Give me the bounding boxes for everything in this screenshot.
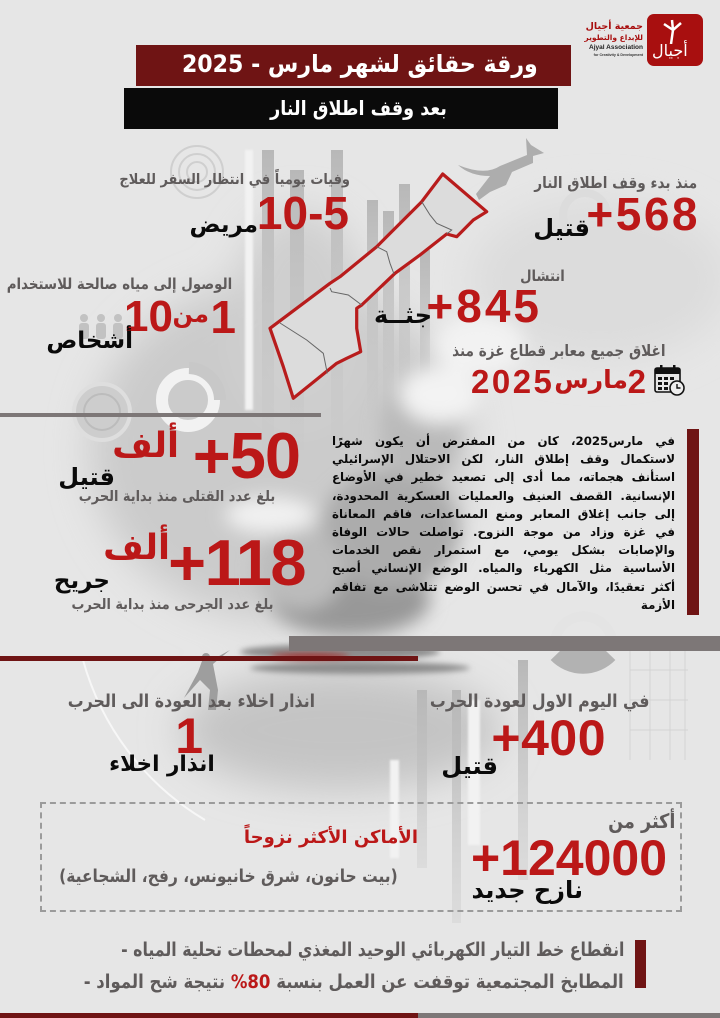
stat: 5-10 patients: 10-5 [257, 187, 349, 239]
stat: 50k killed: +50 [193, 419, 300, 492]
number displaced: +124000 [471, 830, 667, 886]
subtitle bar: black: بعد وقف اطلاق النار [270, 96, 447, 120]
stat: 568 killed: قتيل [533, 214, 590, 242]
people icons ghost [79, 314, 123, 339]
stat: 845 bodies: جثــة [374, 301, 432, 329]
stat: 1 evacuation warning: انذار اخلاء بعد العودة الى الحرب [68, 691, 315, 712]
stat: 118k wounded: جريح [54, 568, 110, 594]
stat: 50k killed: ألف [112, 426, 179, 466]
subtitle bar: black [124, 88, 558, 129]
stat: 118k wounded [54, 524, 305, 613]
title bar: red [136, 45, 571, 86]
divider: gray right [289, 636, 720, 651]
logo text: Ajyal Association [589, 44, 643, 51]
stat: 1 evacuation warning: انذار اخلاء [109, 752, 215, 777]
logo text: جمعية أجيال [586, 21, 643, 32]
paragraph: الأساسية مثل الكهرباء والمياه. الوضع الإنساني أصبح [332, 561, 675, 575]
logo mark [647, 14, 703, 66]
stat: 1 evacuation warning [68, 691, 315, 777]
paragraph: استأنف هجماته، مما أدى إلى تصعيد خطير في الأوضاع [332, 470, 675, 484]
paragraph: إلى جانب إغلاق المعابر ومنع المساعدات، فاقم المعاناة [332, 507, 675, 521]
stat: 400 first day: +400 [491, 710, 606, 766]
soldier silhouette [184, 650, 230, 710]
paragraph [332, 433, 675, 612]
paragraph accent bar [687, 429, 699, 615]
stat: 1 evacuation warning: 1 [175, 708, 203, 764]
stat: 5-10 patients [119, 168, 350, 239]
dashed box: displacement [40, 802, 682, 912]
stat: crossings closed: 2 [628, 363, 646, 400]
stat: 845 bodies: +845 [426, 280, 542, 332]
new displaced label: نازح جديد [471, 876, 583, 904]
paragraph: الأزمة [641, 598, 675, 612]
paragraph: الإنسانية. القصف العنيف والعمليات العسكرية المحدودة، [332, 489, 675, 503]
stat: 118k wounded: ألف [103, 528, 170, 568]
stat: crossings closed [452, 342, 685, 400]
stat: 1 of 10: من [173, 300, 209, 328]
stat: crossings closed: اغلاق جميع معابر قطاع غزة منذ [453, 342, 666, 360]
stat: crossings closed: مارس [554, 365, 628, 394]
logo text: for Creativity & Development [594, 53, 643, 57]
stat: 1 of 10: الوصول إلى مياه صالحة للاستخدام [7, 275, 232, 293]
paragraph: والإصابات بشكل يومي، مع استمرار نقص الخدمات [332, 543, 675, 557]
stat: 845 bodies: انتشال [520, 267, 565, 285]
stat: 568 killed [533, 174, 700, 242]
decorative ghost donuts [74, 146, 612, 661]
stat: 400 first day: قتيل [441, 752, 498, 780]
note: power line: انقطاع خط التيار الكهربائي الوحيد المغذي لمحطات تحلية المياه - [121, 939, 624, 961]
stat: 118k wounded: بلغ عدد الجرحى منذ بداية الحرب [71, 596, 273, 613]
note: kitchens: المطابخ المجتمعية توقفت عن العمل بنسبة 80% نتيجة شح المواد - [84, 971, 624, 993]
stat: 5-10 patients: وفيات يومياً في انتظار السفر للعلاج [119, 171, 350, 188]
notes accent bar [635, 940, 646, 988]
stat: 1 of 10 [7, 275, 236, 354]
stat: 400 first day: في اليوم الاول لعودة الحرب [429, 691, 649, 712]
stat: 50k killed: بلغ عدد القتلى منذ بداية الحرب [79, 488, 275, 505]
stat: 50k killed [58, 419, 300, 505]
places list: (بيت حانون، شرق خانيونس، رفح، الشجاعية) [59, 867, 398, 887]
stat: 50k killed: قتيل [58, 463, 115, 491]
paragraph: في غزة وزاد من موجة النزوح. تواصلت حالات الوفاة [332, 525, 675, 539]
stat: 118k wounded: +118 [168, 526, 305, 599]
stat: 1 of 10: 1 [210, 291, 236, 343]
stat: 568 killed: +568 [586, 188, 700, 240]
stat: 400 first day [429, 691, 649, 780]
bottom strip [0, 1013, 720, 1018]
most displaced heading: الأماكن الأكثر نزوحاً [244, 827, 418, 848]
stat: 1 of 10: 10 [124, 292, 173, 341]
paragraph: أكثر تعقيدًا، والآمال في تحسن الوضع تتلاشى مع تفاقم [332, 580, 675, 594]
logo text: للإبداع والتطوير [584, 33, 643, 42]
stat: 1 of 10: أشخاص [46, 328, 133, 354]
big circle arc [83, 660, 205, 820]
logo mark: أجيال [652, 41, 688, 60]
divider: red left [0, 656, 418, 661]
paragraph: لاستكمال وقف إطلاق النار، لكن الاحتلال الإسرائيلي [332, 452, 675, 466]
more than label: أكثر من [608, 809, 675, 833]
title bar: red: ورقة حقائق لشهر مارس - 2025 [182, 50, 538, 78]
logo [584, 14, 703, 66]
stat: 845 bodies [374, 267, 565, 332]
stat: 568 killed: منذ بدء وقف اطلاق النار [534, 174, 697, 192]
stat: 5-10 patients: مريض [189, 212, 258, 238]
stat: crossings closed: 2025 [471, 363, 554, 400]
paragraph: في مارس2025، كان من المفترض أن يكون شهرًا [332, 434, 675, 448]
icon: calendar [654, 365, 685, 396]
divider: gray left [0, 413, 321, 417]
helicopter silhouette [458, 138, 544, 200]
logo text [584, 20, 643, 57]
